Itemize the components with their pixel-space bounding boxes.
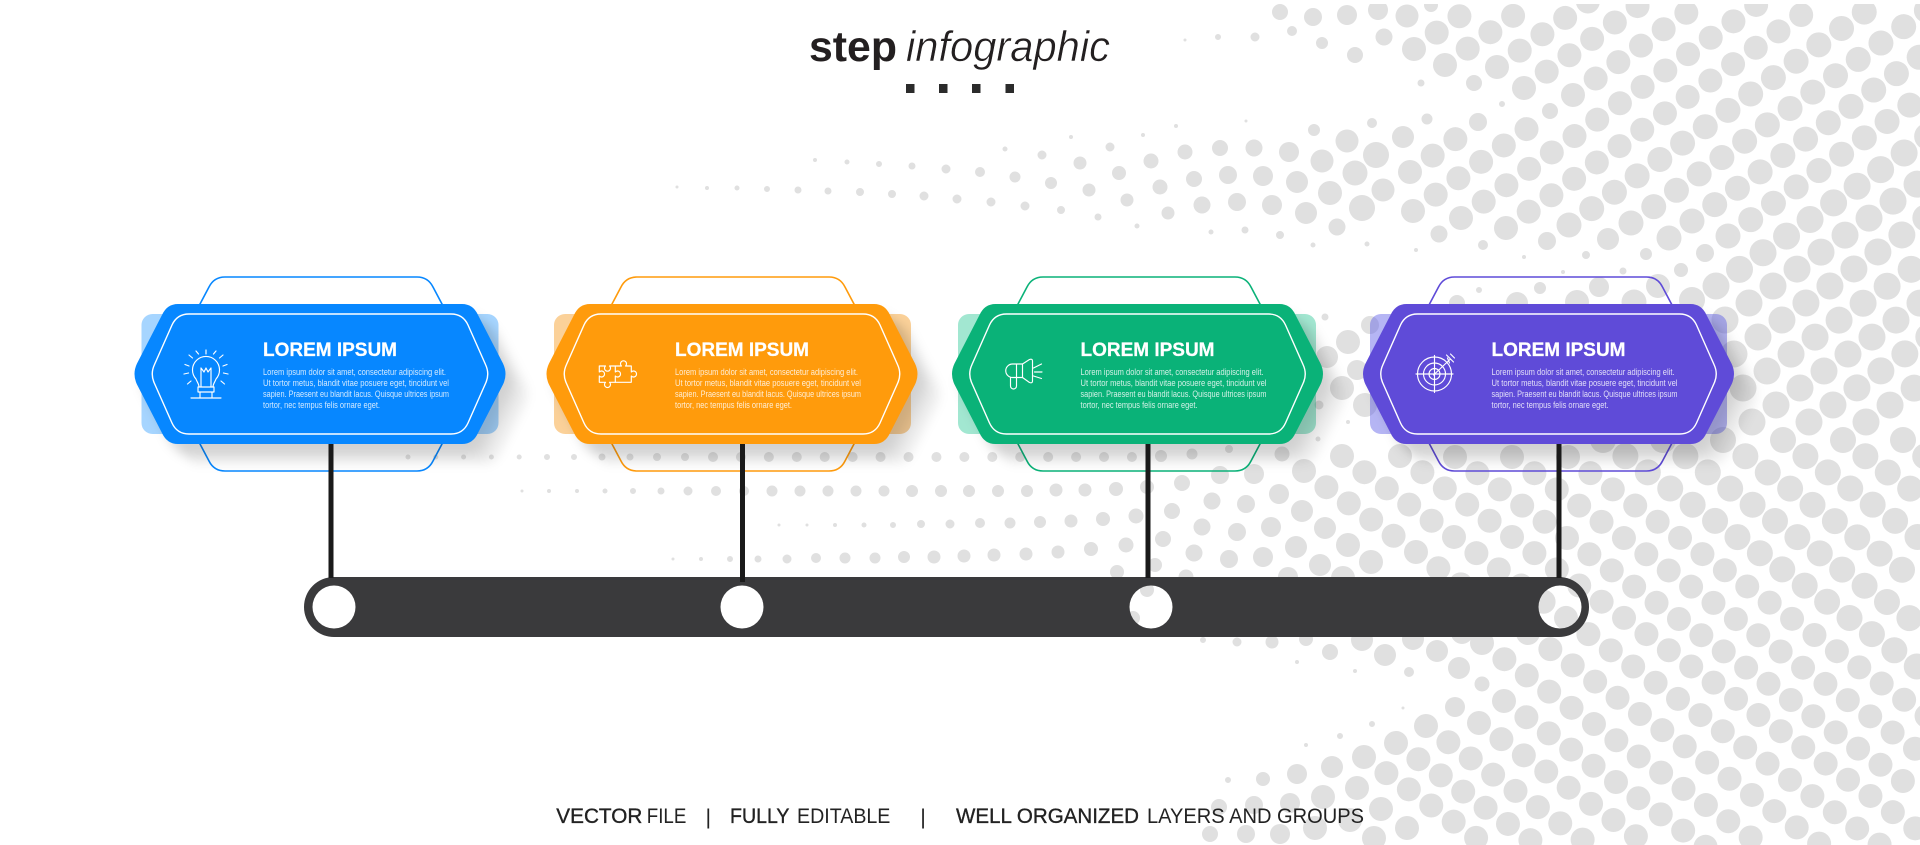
body text: sapien. Praesent eu blandit lacus. Quisque ultrices ipsum	[263, 389, 449, 399]
body text	[675, 367, 861, 410]
body text: Ut tortor metus, blandit vitae posuere eget, tincidunt vel	[1492, 378, 1678, 388]
icon: light bulb	[184, 350, 228, 398]
footer tagline: WELL ORGANIZED	[956, 804, 1139, 828]
body text: sapien. Praesent eu blandit lacus. Quisque ultrices ipsum	[1492, 389, 1678, 399]
icon: megaphone	[1006, 359, 1042, 389]
title decoration squares	[906, 84, 1014, 93]
card body	[134, 304, 506, 444]
body text: tortor, nec tempus felis ornare eget.	[1080, 400, 1198, 410]
icon: target with arrow	[1416, 354, 1454, 392]
card shadow	[957, 312, 1345, 464]
body text: sapien. Praesent eu blandit lacus. Quisque ultrices ipsum	[675, 389, 861, 399]
outline hexagon	[1392, 277, 1708, 471]
footer tagline: FULLY	[730, 804, 790, 828]
body text: Lorem ipsum dolor sit amet, consectetur adipiscing elit.	[263, 367, 446, 377]
heading: LOREM IPSUM	[263, 340, 397, 361]
panel: step 4 card	[1363, 277, 1756, 471]
title: infographic	[906, 23, 1110, 71]
translucent back rectangle	[554, 314, 911, 434]
footer tagline: EDITABLE	[797, 804, 890, 828]
body text: Lorem ipsum dolor sit amet, consectetur adipiscing elit.	[1080, 367, 1264, 377]
footer tagline: LAYERS AND GROUPS	[1147, 804, 1364, 828]
body text: tortor, nec tempus felis ornare eget.	[1492, 400, 1608, 410]
translucent back rectangle	[958, 314, 1316, 434]
translucent back rectangle	[1370, 314, 1727, 434]
footer tagline	[556, 804, 1364, 829]
icon: puzzle pieces	[599, 361, 637, 388]
card shadow	[552, 312, 940, 464]
body text: tortor, nec tempus felis ornare eget.	[675, 400, 792, 410]
heading: LOREM IPSUM	[1080, 340, 1214, 361]
connector stems	[328, 444, 1562, 582]
card shadow	[1368, 312, 1756, 464]
body text	[1080, 367, 1267, 410]
inner white outline	[1381, 314, 1716, 434]
body text: Ut tortor metus, blandit vitae posuere eget, tincidunt vel	[1080, 378, 1267, 388]
footer tagline: |	[920, 805, 926, 829]
card shadow	[140, 312, 528, 464]
heading: LOREM IPSUM	[675, 340, 809, 361]
body text	[263, 367, 449, 410]
panel: step 1 card	[134, 277, 528, 471]
panel: step 2 card	[546, 277, 940, 471]
card body	[952, 304, 1323, 444]
body text: Ut tortor metus, blandit vitae posuere eget, tincidunt vel	[263, 378, 449, 388]
card body	[546, 304, 918, 444]
body text	[1492, 367, 1678, 410]
outline hexagon	[575, 277, 891, 471]
title	[809, 23, 1110, 71]
footer tagline: FILE	[647, 804, 686, 828]
inner white outline	[564, 314, 900, 434]
body text: Lorem ipsum dolor sit amet, consectetur adipiscing elit.	[675, 367, 858, 377]
inner white outline	[152, 314, 488, 434]
body text: Lorem ipsum dolor sit amet, consectetur adipiscing elit.	[1492, 367, 1674, 377]
body text: sapien. Praesent eu blandit lacus. Quisque ultrices ipsum	[1080, 389, 1266, 399]
heading: LOREM IPSUM	[1492, 340, 1626, 361]
timeline bar with four holes	[304, 577, 1589, 637]
outline hexagon	[163, 277, 479, 471]
title: step	[809, 23, 897, 71]
panel: step 3 card	[952, 277, 1345, 471]
footer tagline: |	[706, 805, 711, 829]
inner white outline	[970, 314, 1305, 434]
body text: tortor, nec tempus felis ornare eget.	[263, 400, 380, 410]
outline hexagon	[981, 277, 1297, 471]
body text: Ut tortor metus, blandit vitae posuere eget, tincidunt vel	[675, 378, 861, 388]
footer tagline: VECTOR	[556, 804, 642, 828]
translucent back rectangle	[142, 314, 498, 434]
card body	[1363, 304, 1734, 444]
